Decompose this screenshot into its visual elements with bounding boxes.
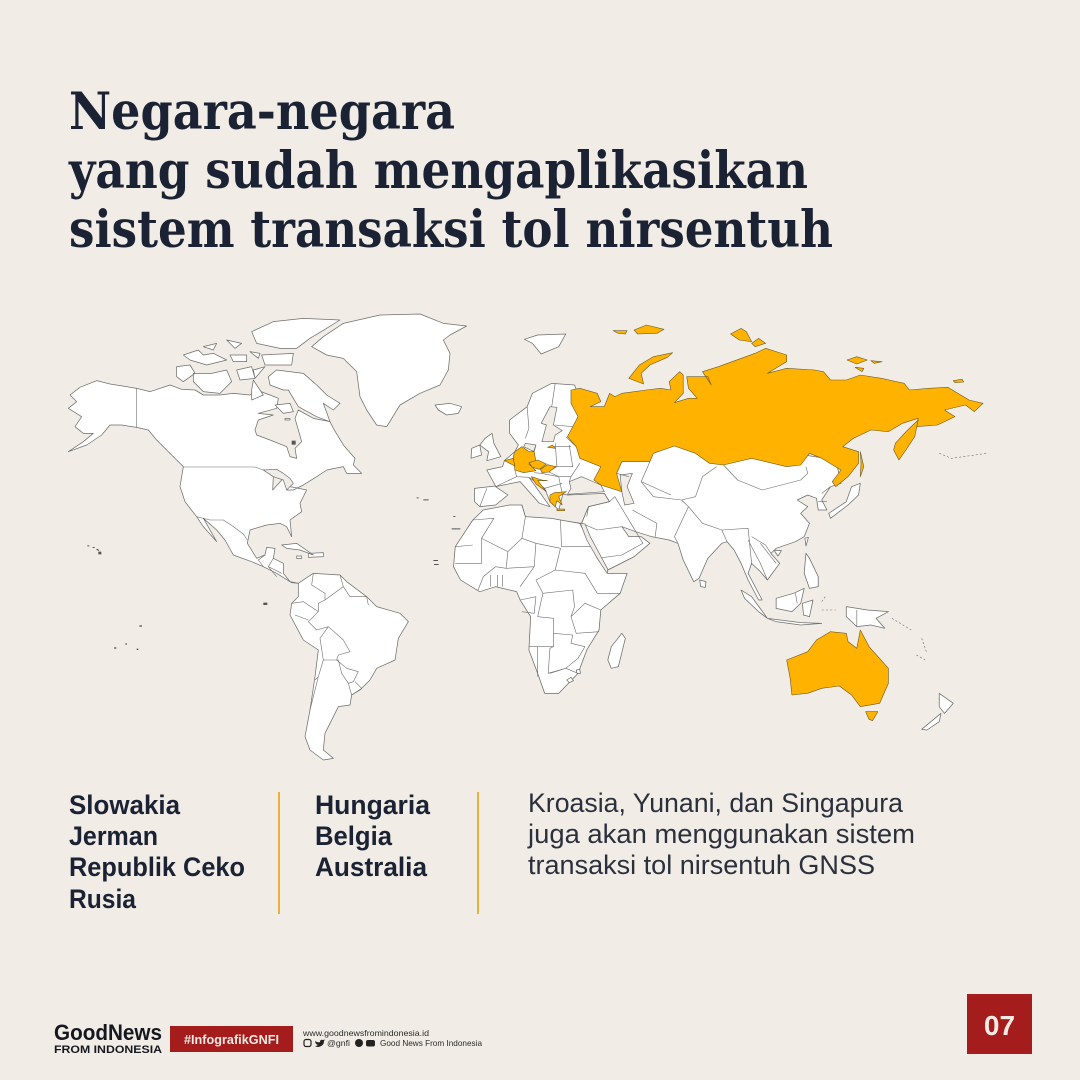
Slovakia [540, 465, 556, 473]
Inland seas [524, 407, 634, 505]
Great Britain and Ireland [471, 433, 501, 461]
Arctic islands [177, 318, 340, 422]
Kaliningrad [547, 445, 555, 448]
country list: column 2: Hungaria [315, 790, 431, 820]
footer contact: Good News From Indonesia [380, 1038, 482, 1048]
Madagascar [608, 633, 625, 668]
divider 2 [477, 792, 479, 914]
Russia [567, 348, 983, 492]
page number badge [967, 994, 1032, 1054]
country list: column 2 [315, 790, 431, 882]
note text: juga akan menggunakan sistem [527, 819, 915, 849]
hashtag badge [170, 1026, 293, 1052]
title: sistem transaksi tol nirsentuh [69, 200, 833, 260]
Hawaii and Atlantic specks [87, 497, 460, 650]
Iceland [435, 403, 462, 415]
world map [68, 314, 987, 760]
country list: column 1: Slowakia [69, 790, 181, 820]
Country borders: Europe and Asia [480, 383, 831, 580]
Japan [829, 483, 860, 518]
Croatia [531, 477, 547, 492]
footer logo [54, 1020, 162, 1056]
note text: transaksi tol nirsentuh GNSS [528, 850, 875, 880]
map: Europe, Asia, Africa, Oceania [454, 325, 987, 730]
Red Sea [580, 523, 608, 573]
Germany and Belgium highlighted [504, 447, 536, 473]
map: Americas and Greenland [68, 314, 467, 760]
note text: Kroasia, Yunani, dan Singapura [528, 788, 904, 818]
Russian islands: Kamchatka, Sakhalin, Novaya Zemlya, arctic [613, 325, 964, 477]
Australia [787, 630, 888, 707]
New Zealand [922, 693, 953, 730]
Svalbard [524, 334, 566, 354]
North America [68, 381, 362, 583]
country list: column 1: Jerman [69, 821, 158, 851]
Greece [550, 492, 566, 511]
footer contact: www.goodnewsfromindonesia.id [302, 1028, 429, 1038]
country list: column 1: Rusia [69, 884, 137, 914]
page number badge: 07 [984, 1010, 1015, 1041]
title: yang sudah mengaplikasikan [68, 141, 808, 201]
Africa [454, 505, 627, 693]
Tasmania [866, 712, 878, 721]
divider 1 [278, 792, 280, 914]
country list: column 1: Republik Ceko [69, 852, 245, 882]
Taiwan, Hainan, Sri Lanka [700, 537, 808, 587]
footer logo: FROM INDONESIA [54, 1044, 162, 1056]
Greenland [312, 314, 467, 427]
footer contact: @gnfi [327, 1038, 350, 1048]
country list: column 2: Australia [315, 852, 428, 882]
Caribbean islands [282, 543, 323, 558]
title [68, 82, 833, 260]
footer logo: GoodNews [54, 1020, 162, 1045]
country list: column 2: Belgia [315, 821, 393, 851]
note text [527, 788, 915, 880]
Eurasia base [475, 383, 841, 600]
Indonesia, Philippines, New Guinea [741, 453, 987, 660]
hashtag badge: #InfografikGNFI [184, 1032, 279, 1047]
country list: column 1 [69, 790, 245, 914]
South America [290, 573, 408, 760]
Czech Republic [529, 460, 546, 469]
title: Negara-negara [69, 82, 455, 142]
footer contact [302, 1028, 482, 1048]
